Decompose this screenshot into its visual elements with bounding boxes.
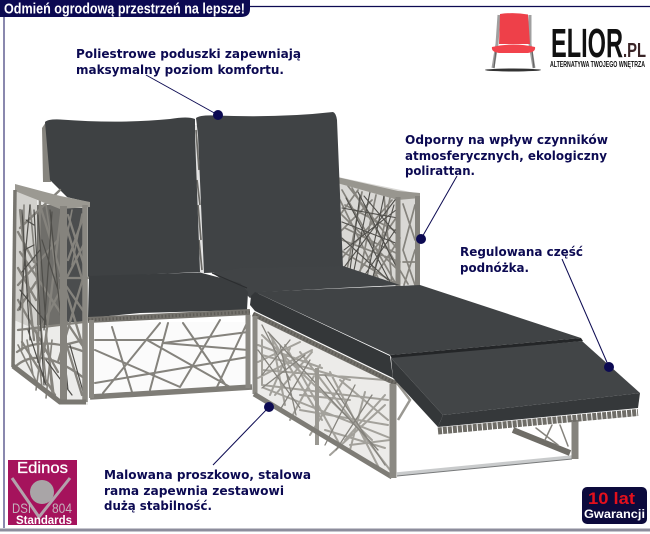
logo: Elior.pl: [485, 13, 646, 72]
title banner: Odmień ogrodową przestrzeń na lepsze!: [4, 0, 245, 18]
callout: polyrattan: atmosferycznych, ekologiczny: [405, 148, 607, 163]
badge: 10 lat warranty: Gwarancji: [584, 507, 645, 521]
furniture illustration: [13, 112, 640, 478]
callout: steel frame: [104, 402, 311, 513]
left back frame edge: [42, 122, 51, 182]
badge: 10 lat warranty: [582, 487, 647, 524]
badge: Edinos DSI 804 Standards: DSI: [12, 500, 31, 516]
callout: polyrattan: Odporny na wpływ czynników: [405, 132, 608, 147]
badge: Edinos DSI 804 Standards: Edinos: [17, 460, 68, 477]
footrest wicker edge: [438, 412, 638, 431]
badge: Edinos DSI 804 Standards: Standards: [16, 513, 72, 527]
badge: Edinos DSI 804 Standards: 804: [52, 500, 72, 516]
callout: steel frame: Malowana proszkowo, stalowa: [104, 467, 311, 482]
far right armrest: [337, 177, 420, 287]
ottoman frame: [253, 314, 397, 478]
ottoman cushion: [250, 285, 640, 427]
left armrest: [13, 184, 90, 405]
callout: footrest: Regulowana część: [460, 244, 584, 259]
callout: footrest: [460, 244, 614, 372]
back cushions: [45, 112, 343, 277]
steel tube leg: [397, 383, 572, 476]
footrest support: [513, 420, 575, 459]
front seat frame: [88, 312, 252, 398]
callout: cushions: [76, 46, 301, 120]
callout: steel frame: dużą stabilność.: [104, 498, 212, 513]
callout: cushions: Poliestrowe poduszki zapewniają: [76, 46, 301, 61]
badge: Edinos DSI 804 Standards: [8, 460, 77, 527]
callout: polyrattan: polirattan.: [405, 163, 475, 178]
gap behind cushions: [193, 125, 205, 273]
icon: red chair: [485, 13, 541, 72]
callout: steel frame: rama zapewnia zestawowi: [104, 483, 284, 498]
callout: polyrattan: [405, 132, 608, 244]
badge: 10 lat warranty: 10 lat: [588, 489, 635, 508]
callout: cushions: maksymalny poziom komfortu.: [76, 62, 284, 77]
callout: footrest: podnóżka.: [460, 260, 529, 275]
seat cushions: [88, 266, 400, 318]
